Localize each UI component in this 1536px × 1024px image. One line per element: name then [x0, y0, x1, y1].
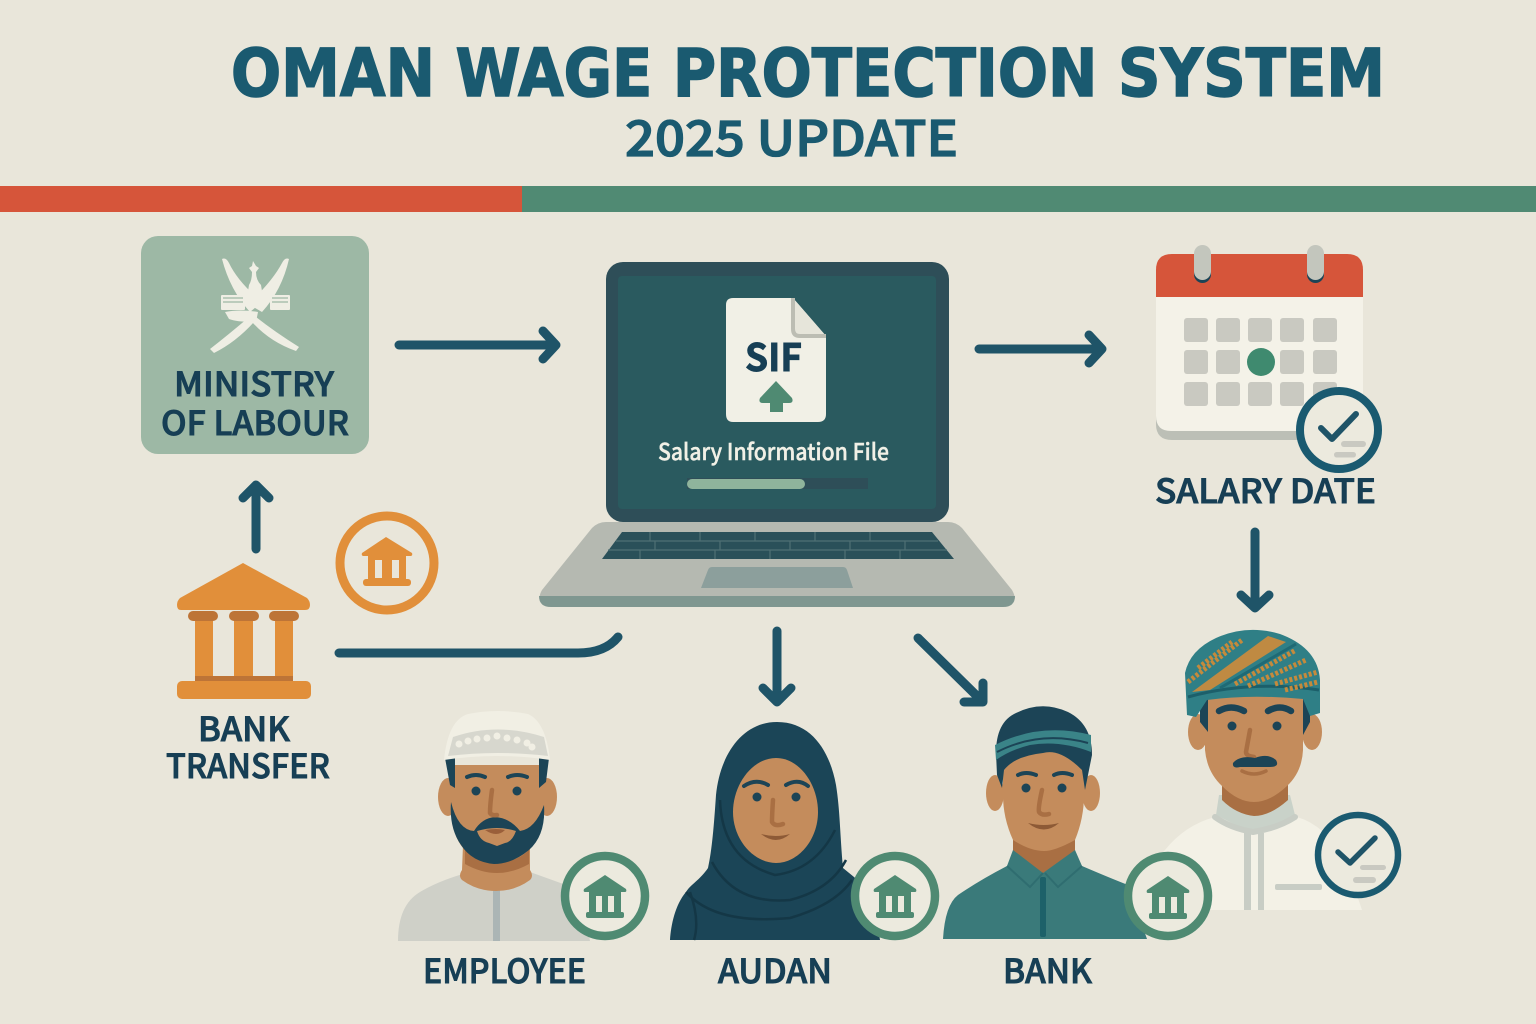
icon: omani check badge: [1318, 815, 1398, 895]
icon: bank employee badge: [1128, 856, 1208, 936]
icon: bank building: [177, 563, 311, 699]
bank transfer label: [166, 703, 330, 788]
subtitle: 2025 UPDATE: [625, 100, 958, 171]
arrow: bank to ministry: [243, 485, 269, 549]
laptop screen: [606, 262, 949, 522]
progress bar: [687, 478, 868, 489]
arrow: laptop to audan: [763, 631, 791, 702]
arrow: bank to laptop connector: [339, 637, 618, 653]
arrow: laptop to calendar: [979, 335, 1102, 363]
icon: orange bank badge: [340, 516, 434, 610]
arrow: ministry to laptop: [399, 331, 556, 359]
arrow: laptop to bank: [918, 638, 983, 702]
turban: [1185, 630, 1320, 717]
ministry label: MINISTRY: [174, 358, 335, 406]
person: bank employee: [943, 706, 1208, 939]
salary date label: SALARY DATE: [1155, 465, 1376, 513]
title: OMAN WAGE PROTECTION SYSTEM: [231, 35, 1385, 112]
icon: calendar check badge: [1300, 391, 1378, 469]
audan label: AUDAN: [718, 945, 832, 993]
icon: employee bank badge: [565, 856, 645, 936]
SIF document icon: [726, 298, 826, 422]
screen caption: Salary Information File: [658, 433, 889, 467]
person: employee: [398, 711, 645, 941]
icon: audan bank badge: [855, 856, 935, 936]
panel: ministry of labour: [141, 236, 369, 454]
ministry label: OF LABOUR: [161, 397, 349, 445]
calendar icon: [1156, 245, 1378, 469]
bank transfer label: BANK: [198, 703, 290, 751]
person: omani man with turban: [1143, 630, 1398, 910]
header divider bar: [0, 186, 1536, 212]
arrow: salary date down: [1241, 532, 1269, 608]
ministry label: [161, 358, 349, 445]
laptop base: [539, 522, 1015, 607]
icon: Oman emblem: [210, 258, 299, 353]
person: audan: [670, 722, 935, 940]
bank label: BANK: [1003, 945, 1092, 993]
laptop: [539, 262, 1015, 607]
SIF document icon: SIF: [745, 327, 802, 382]
employee label: EMPLOYEE: [423, 945, 586, 993]
bank transfer label: TRANSFER: [166, 740, 330, 788]
